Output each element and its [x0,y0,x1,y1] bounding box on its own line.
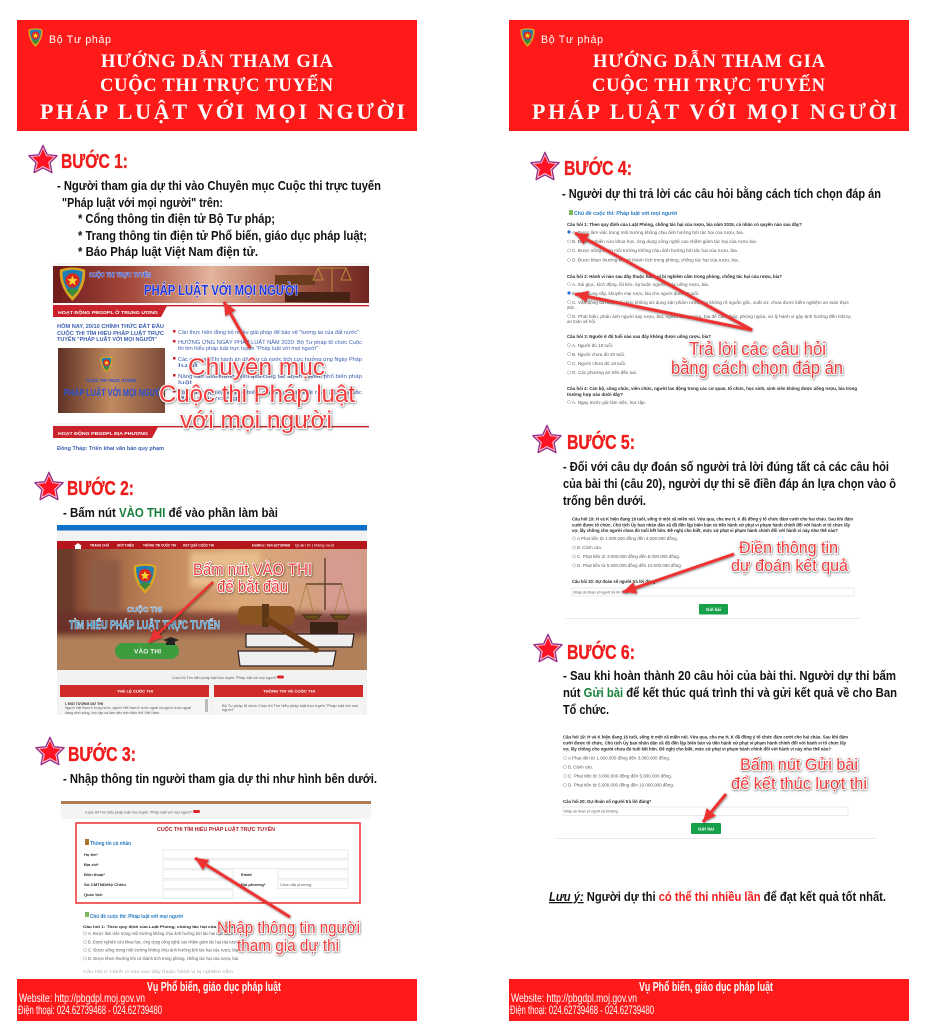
screenshot: answering questions: Câu hỏi 4: Cán bộ, công chức, viên chức, người lao động trong các cơ quan, tổ chức, học sinh, sinh viên không được uống rượu, bia trong [567,385,857,391]
step 1 text: * Cổng thông tin điện tử Bộ Tư pháp; [78,212,275,226]
screenshot: submit exam: cưới được tổ chức, Chủ tịch Ủy ban nhân dân xã đã đến lập biên bản và tiến hành xử phạt vi phạm hành chính đối với hành vi tổ chức lấy [563,740,846,746]
annotation: enter details: Nhập thông tin người [217,918,360,937]
central activities panel: Các cơ quan Thi hành án dân sự cả nước tích cực hưởng ứng Ngày Pháp [178,356,362,363]
central activities panel: luật [178,380,193,386]
screenshot: answering questions: D. Phát hiện, phản ánh người say rượu, bia; người uống rượu, bia để cảnh báo, phòng ngừa, xử lý hành vi gây ảnh hưởng đến trật tự, [572,313,852,319]
icon: scales of justice [298,558,350,634]
screenshot: answering questions: trường hợp nào dưới đây? [567,392,623,397]
screenshot: answering questions: an toàn xã hội. [567,319,596,324]
screenshot: prediction question: A Phạt tiền từ 1.000.000 đồng đến 3.000.000 đồng. [577,536,678,541]
icon: gavel on books [238,604,354,666]
panel: contest information [214,685,363,715]
central activities panel: địa phương [178,396,239,402]
screenshot: prediction question: Câu hỏi 20: Dự đoán số người trả lời đúng* [572,578,657,584]
screenshot: prediction question: vợ, lấy chồng cho người chưa đủ tuổi kết hôn. Đề nghị cho biết, mức xử phạt vi phạm hành chính đối với hành vi này như thế nào? [572,527,838,533]
footer right: Vụ Phổ biến, giáo dục pháp luật [639,979,773,994]
exam questions preview: B. Được nghiên cứu khoa học, ứng dụng công nghệ cao nhằm giảm tác hại của rượu [88,938,238,944]
navigation bar: Hotline: 024.62739468 [252,544,290,548]
exam questions preview: Câu hỏi 1: Theo quy định của Luật Phòng, chống tác hại của rượu, bia [83,924,239,929]
step 4 text: - Người dự thi trả lời các câu hỏi bằng cách tích chọn đáp án [562,186,881,201]
panel: right page [509,20,909,1021]
local activities panel: HOẠT ĐỘNG PBGDPL ĐỊA PHƯƠNG [58,429,148,436]
screenshot: registration form [61,801,371,974]
annotation: choose answers [671,339,843,378]
panel: contest information: người" [222,708,235,712]
annotation: press start: để bắt đầu [217,577,288,596]
screenshot: submit exam: Câu hỏi 19: H và K hiện đang 16 tuổi, sống ở một xã miền núi. Vừa qua, cha mẹ H, K đã đồng ý tổ chức đám cưới cho hai cháu. Sau khi đám [563,734,848,740]
icon: ministry emblem [28,28,43,47]
annotation: enter prediction [731,538,849,575]
annotation: enter prediction: dự đoán kết quả [731,556,849,575]
annotation: press submit: để kết thúc lượt thi [731,774,867,793]
screenshot: answering questions: B. Người chưa đủ 20 tuổi. [572,351,625,357]
screenshot: answering questions: Câu hỏi 3: Người ở độ tuổi nào sau đây không được uống rượu, bia? [567,333,711,339]
panel: contest rules: I. ĐỐI TƯỢNG DỰ THI [65,701,103,706]
step 6 text [563,669,897,717]
step 1 text: * Báo Pháp luật Việt Nam điện tử. [78,245,258,259]
screenshot: answering questions: Chủ đề cuộc thi: Pháp luật với mọi người [574,211,678,217]
step 5 text [563,460,896,508]
central activities panel: HOẠT ĐỘNG PBGDPL Ở TRUNG ƯƠNG [58,308,158,315]
screenshot: answering questions: C. Vận động cá nhân, tổ chức không sử dụng sản phẩm rượu, bia không rõ nguồn gốc, xuất xứ, chưa được kiểm nghiệm an toàn thực [572,299,850,305]
screenshot: answering questions: A. Người đủ 18 tuổi. [572,342,613,348]
personal info form: Số CMTND/Hộ Chiếu [84,882,127,887]
screenshot: prediction question: Gửi bài [706,607,721,612]
personal info form: CUỘC THI TÌM HIỂU PHÁP LUẬT TRỰC TUYẾN [157,825,275,833]
screenshot: submit exam: Nhập dự đoán số người trả lời đúng [564,810,618,814]
screenshot: submit exam: C. Phạt tiền từ 3.000.000 đồng đến 5.000.000 đồng. [568,774,672,778]
screenshot: submit exam: Câu hỏi 20: Dự đoán số người trả lời đúng* [563,798,651,804]
local activities panel [53,426,369,452]
screenshot: prediction question: Câu hỏi 19: H và K hiện đang 16 tuổi, sống ở một xã miền núi. Vừa qua, cha mẹ H, K đã đồng ý tổ chức đám cưới cho hai cháu. Sau khi đám [572,516,853,522]
portal banner [53,266,369,303]
step 1 heading: BƯỚC 1: [61,149,128,173]
personal info form: Thông tin cá nhân [90,841,131,847]
title line 3: PHÁP LUẬT VỚI MỌI NGƯỜI [40,99,405,124]
screenshot: prediction question: D. Phạt tiền từ 5.000.000 đồng đến 10.000.000 đồng. [577,563,682,568]
exam questions preview: A. Được làm việc trong môi trường không chịu ảnh hưởng bởi tác hại của rượu [88,930,233,936]
header banner left [17,20,417,131]
annotation: choose answers: bằng cách chọn đáp án [671,357,843,378]
screenshot: submit exam: A Phạt tiền từ 1.000.000 đồng đến 3.000.000 đồng. [568,756,670,760]
screenshot: submit exam: Gửi bài [698,826,714,832]
notice line: Cuộc thi Tìm hiểu pháp luật trực tuyến "Pháp luật với mọi người" [172,676,278,680]
central activities panel: Tập huấn nghiệp vụ phổ biến, giáo dục pháp luật năm 2020 tại các [178,389,363,396]
personal info form: Điện thoại* [84,872,105,877]
personal info form: Email [241,872,252,877]
screenshot: answering questions: Câu hỏi 1: Theo quy định của Luật Phòng, chống tác hại của rượu, bia năm 2019, cá nhân có quyền nào sau đây? [567,221,802,227]
hero image [57,549,367,670]
step 2 text: - Bấm nút VÀO THI để vào phần làm bài [63,505,278,520]
annotation: enter details [217,918,360,955]
screenshot: answering questions: A. Được làm việc trong môi trường không chịu ảnh hưởng bởi tác hại của rượu, bia. [572,229,744,235]
panel: contest information: THÔNG TIN VỀ CUỘC THI [263,688,315,694]
step 6 text: - Sau khi hoàn thành 20 câu hỏi của bài thi. Người dự thi bấm [563,669,896,683]
arrow to form [195,858,290,917]
title line 1: HƯỚNG DẪN THAM GIA [101,50,334,72]
screenshot: answering questions [567,210,857,405]
organisation name: Bộ Tư pháp [49,34,111,46]
panel: contest rules: Người Việt Nam ở trong nước, người Việt Nam ở nước ngoài và người nước ngoài [65,706,191,710]
annotation: enter prediction: Điền thông tin [739,538,838,557]
step 1 text: * Trang thông tin điện tử Phổ biến, giáo dục pháp luật; [78,229,367,243]
annotation: press submit [731,755,867,793]
central activities panel: Cần thực hiện đồng bộ nhiều giải pháp để bảo vệ "tương lai của đất nước" [178,329,359,336]
hero image: TÌM HIỂU PHÁP LUẬT TRỰC TUYẾN [69,617,220,632]
step 3 heading: BƯỚC 3: [68,742,136,766]
screenshot: answering questions: D. Các phương án trên đều sai. [572,370,637,375]
personal info form: Địa chỉ* [84,862,99,867]
button: start exam [115,637,179,659]
step 3 text: - Nhập thông tin người tham gia dự thi như hình bên dưới. [63,772,377,786]
annotation: section name: với mọi người [180,407,332,434]
exam questions preview: Câu hỏi 2: Hành vi nào sau đây thuộc hành vi bị nghiêm cấm [83,968,233,974]
central activities panel: Nâng cao chất lượng, hiệu quả công tác tuyên truyền, phổ biến pháp [178,373,362,380]
step 6 text: nút Gửi bài để kết thúc quá trình thi và gửi kết quả về cho Ban [563,686,897,700]
local activities panel: Đồng Tháp: Triển khai văn bản quy phạm [57,445,165,452]
annotation: enter details: tham gia dự thi [237,936,339,955]
footer right [509,979,909,1021]
exam questions preview: Chủ đề cuộc thi: Pháp luật với mọi người [90,914,184,920]
screenshot: submit exam [557,734,876,839]
central activities panel: PHÁP LUẬT VỚI MỌI NGƯỜI [64,386,164,399]
panel: contest rules [60,685,209,715]
title line 2: CUỘC THI TRỰC TUYẾN [592,74,826,96]
panel: contest information: Bộ Tư pháp tổ chức Cuộc thi Tìm hiểu pháp luật trực tuyến "Pháp luật với mọi [222,704,358,708]
screenshot: answering questions: B. Được nghiên cứu khoa học, ứng dụng công nghệ cao nhằm giảm tác hại của rượu bia. [572,238,757,244]
screenshot: submit exam: B. Cảnh cáo. [568,764,593,770]
screenshot: prediction question: C. Phạt tiền từ 3.000.000 đồng đến 5.000.000 đồng. [577,554,680,559]
central activities panel: TUYẾN "PHÁP LUẬT VỚI MỌI NGƯỜI" [57,335,158,343]
screenshot: contest home page [50,525,370,715]
navigation bar: THÔNG TIN CUỘC THI [143,542,176,548]
portal banner: PHÁP LUẬT VỚI MỌI NGƯỜI [144,281,298,299]
step 1 text: "Pháp luật với mọi người" trên: [62,196,223,210]
header banner right [509,20,909,131]
arrow to submit button [703,794,726,822]
screenshot: prediction question: Nhập dự đoán số người trả lời đúng [574,590,628,594]
footer right: Website: http://pbgdpl.moj.gov.vn [511,991,637,1005]
step 6 heading [534,634,635,664]
navigation bar: TRANG CHỦ [90,542,109,548]
step 5 heading: BƯỚC 5: [567,430,635,454]
step 6 text: Tổ chức. [563,703,609,717]
step 1 text [57,179,381,259]
screenshot: answering questions: B. Bán, cung cấp, khuyến mại rượu, bia cho người dưới 18 tuổi. [572,290,699,296]
portal banner: CUỘC THI TRỰC TUYẾN [89,269,151,279]
organisation name: Bộ Tư pháp [541,34,603,46]
title line 2: CUỘC THI TRỰC TUYẾN [100,74,334,96]
personal info form: Chọn địa phương [280,882,311,887]
screenshot: answering questions: C. Được sống trong môi trường không chịu ảnh hưởng bởi tác hại của rượu, bia. [572,247,738,253]
step 1 text: - Người tham gia dự thi vào Chuyên mục Cuộc thi trực tuyến [57,179,381,193]
arrow to input [623,554,734,592]
screenshot: registration form: Cuộc thi Tìm hiểu pháp luật trực tuyến "Pháp luật với mọi người" [85,810,193,814]
central activities panel: HÔM NAY, 20/10 CHÍNH THỨC ĐẮT ĐẦU [57,322,164,330]
exam questions preview: C. Được sống trong môi trường không chịu ảnh hưởng bởi tác hại của rượu, bia [88,946,238,952]
step 3 heading [36,737,136,766]
screenshot: answering questions: A. Ngay trước giờ làm việc, học tập. [572,400,646,405]
personal info form: Địa phương* [241,882,266,887]
navigation bar [57,541,367,550]
personal info form: Họ tên* [84,852,98,857]
navigation bar: KẾT QUẢ CUỘC THI [183,542,214,548]
annotation: section name: Cuộc thi Pháp luật [159,381,355,408]
hero image: CUỘC THI [127,605,162,614]
footer left: Website: http://pbgdpl.moj.gov.vn [19,991,145,1005]
central activities panel: CUỘC THI TÌM HIỂU PHÁP LUẬT TRỰC [57,329,164,337]
screenshot: answering questions: A. Xúi giục, kích động, lôi kéo, ép buộc người khác uống rượu, bia. [572,282,709,287]
arrow to button [149,582,213,642]
step 6 heading: BƯỚC 6: [567,640,635,664]
annotation: press start [193,560,312,596]
personal info form: Quốc tịch [84,892,103,897]
central activities panel: HƯỞNG ỨNG NGÀY PHÁP LUẬT NĂM 2020: Bộ Tư pháp tổ chức Cuộc [178,339,363,346]
annotation: section name: Chuyên mục [188,354,325,381]
arrows to selected answers [575,233,752,330]
step 1 heading [29,145,128,173]
arrow to banner [224,302,250,348]
central activities panel: thi tìm hiểu pháp luật trực tuyến "Pháp luật với mọi người" [178,345,318,352]
panel: contest rules: đang sinh sống, học tập và làm việc trên lãnh thổ Việt Nam. [65,711,160,715]
central activities panel: luật [178,363,200,369]
step 4 heading [531,152,632,180]
annotation: press submit: Bấm nút Gửi bài [740,755,858,774]
note: Lưu ý: Người dự thi có thể thi nhiều lần để đạt kết quả tốt nhất. [549,890,886,904]
icon: ministry emblem [520,28,535,47]
step 4 heading: BƯỚC 4: [564,156,632,180]
button: start exam: VÀO THI [134,646,161,656]
screenshot: prediction question: cưới được tổ chức, Chủ tịch Ủy ban nhân dân xã đã đến lập biên bản và tiến hành xử phạt vi phạm hành chính đối với hành vi tổ chức lấy [572,522,850,528]
title line 3: PHÁP LUẬT VỚI MỌI NGƯỜI [532,99,897,124]
screenshot: answering questions: C. Người chưa đủ 18 tuổi. [572,360,626,366]
step 5 text: trống bên dưới. [563,494,646,508]
title line 1: HƯỚNG DẪN THAM GIA [593,50,826,72]
screenshot: submit exam: D. Phạt tiền từ 5.000.000 đồng đến 10.000.000 đồng. [568,782,674,788]
screenshot: prediction question [566,516,860,619]
panel: left page [17,20,417,1021]
screenshot: answering questions: phẩm. [567,304,575,310]
screenshot: prediction question: B. Cảnh cáo. [577,545,602,550]
central activities panel [53,305,369,423]
screenshot: answering questions: D. Được khen thưởng khi có thành tích trong phòng, chống tác hại của rượu, bia. [572,256,739,262]
exam questions preview: D. Được khen thưởng khi có thành tích trong phòng, chống tác hại của rượu, bia [88,955,238,961]
screenshot: legal news portal [53,263,369,452]
screenshot: submit exam: vợ, lấy chồng cho người chưa đủ tuổi kết hôn. Đề nghị cho biết, mức xử phạt vi phạm hành chính đối với hành vi này như thế nào? [563,746,831,752]
step 2 heading [35,472,134,500]
step 5 text: - Đối với câu dự đoán số người trả lời đúng tất cả các câu hỏi [563,460,889,474]
step 5 heading [533,425,635,454]
personal info form [76,823,360,903]
step 2 heading: BƯỚC 2: [67,476,134,500]
panel: contest rules: THỂ LỆ CUỘC THI [117,688,153,694]
footer right: Điện thoại: 024.62739468 - 024.62739480 [510,1003,654,1017]
footer left [17,979,417,1021]
exam questions preview [83,912,239,974]
annotation: section name [159,354,355,434]
annotation: press start: Bấm nút VÀO THI [193,560,312,579]
annotation: choose answers: Trả lời các câu hỏi [689,339,826,359]
navigation bar: GIỚI THIỆU [117,542,134,548]
central activities panel: CUỘC THI TRỰC TUYẾN [86,376,136,383]
screenshot: answering questions: Câu hỏi 2: Hành vi nào sau đây thuộc hành vi bị nghiêm cấm trong phòng, chống tác hại của rượu, bia? [567,273,782,279]
navigation bar: Quản trị | Đăng xuất [295,544,335,548]
footer left: Vụ Phổ biến, giáo dục pháp luật [147,979,281,994]
footer left: Điện thoại: 024.62739468 - 024.62739480 [18,1003,162,1017]
